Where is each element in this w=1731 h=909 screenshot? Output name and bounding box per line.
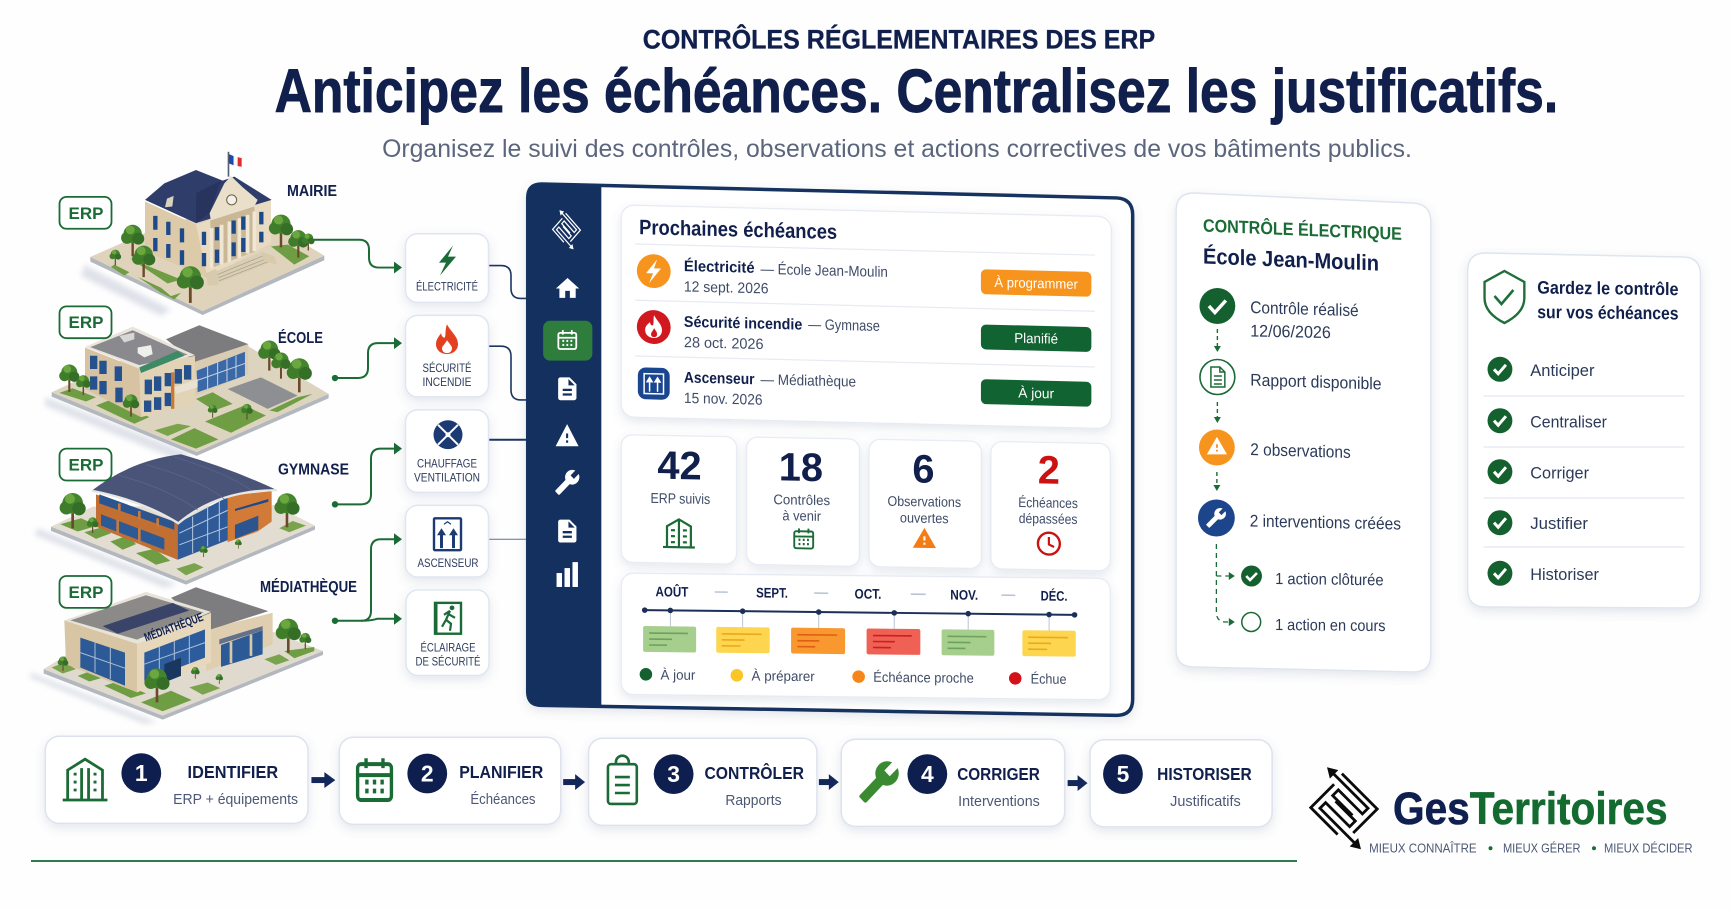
badge: médiathèque: ERP — [69, 583, 103, 602]
step 1: identifier: 1 — [135, 760, 148, 786]
stat: contrôles à venir: à venir — [782, 507, 821, 524]
card: sécurité incendie: INCENDIE — [422, 375, 472, 389]
building: école — [44, 325, 329, 459]
step: observations — [1199, 430, 1351, 466]
tagline — [1369, 841, 1692, 856]
arrow — [563, 774, 585, 790]
step 1: identifier: IDENTIFIER — [188, 762, 278, 782]
equipment cards — [406, 234, 489, 676]
badge: école — [60, 306, 112, 338]
row: sécurité incendie: Sécurité incendie — [684, 314, 803, 334]
sidebar warning icon — [556, 424, 579, 446]
heading: Gardez le contrôle — [1537, 277, 1679, 299]
row: sécurité incendie: — Gymnase — [808, 316, 880, 335]
step: contrôle réalisé: Contrôle réalisé — [1250, 298, 1359, 320]
site name: École Jean-Moulin — [1203, 243, 1379, 276]
step 5: historiser: 5 — [1117, 761, 1130, 787]
stat: contrôles à venir — [747, 437, 860, 566]
step 3: contrôler: 3 — [667, 761, 680, 787]
step 5: historiser — [1090, 740, 1272, 827]
panel: indicateurs — [621, 435, 1110, 571]
row: électricité: — École Jean-Moulin — [761, 261, 888, 281]
step 4: corriger — [841, 739, 1065, 826]
stat: échéances dépassées — [991, 441, 1110, 571]
step 4: corriger: 4 — [921, 761, 934, 787]
step: interventions — [1198, 500, 1401, 536]
stat: observations ouvertes: Observations — [887, 493, 961, 510]
item: historiser — [1488, 561, 1599, 586]
card: ascenseur: ASCENSEUR — [418, 556, 479, 570]
badge: gymnase — [60, 449, 112, 480]
legend: Échéance proche — [873, 669, 974, 686]
item: anticiper: Anticiper — [1530, 361, 1595, 380]
stat: échéances dépassées: dépassées — [1019, 510, 1077, 527]
step: observations: 2 observations — [1250, 440, 1351, 462]
row: ascenseur: Ascenseur — [684, 370, 755, 388]
card: sécurité incendie: SÉCURITÉ — [422, 360, 472, 375]
step 5: historiser: HISTORISER — [1157, 764, 1252, 784]
step 5: historiser: Justificatifs — [1170, 793, 1241, 810]
step: interventions: 2 interventions créées — [1250, 511, 1401, 534]
header — [275, 22, 1558, 163]
surtitle: CONTRÔLES RÉGLEMENTAIRES DES ERP — [643, 22, 1155, 55]
heading: CONTRÔLE ÉLECTRIQUE — [1203, 214, 1402, 244]
row: sécurité incendie: 28 oct. 2026 — [684, 334, 764, 353]
sidebar bars icon — [557, 562, 578, 587]
row: sécurité incendie: Planifié — [1014, 330, 1058, 347]
item: historiser: Historiser — [1530, 565, 1599, 584]
legend — [640, 666, 1067, 687]
row: électricité: 12 sept. 2026 — [684, 278, 768, 297]
stat: échéances dépassées: Échéances — [1018, 494, 1078, 511]
tagline: MIEUX CONNAÎTRE — [1369, 841, 1477, 856]
legend: Échue — [1031, 671, 1067, 687]
sidebar — [528, 184, 601, 706]
logo text — [1369, 783, 1692, 856]
badge: mairie: ERP — [69, 204, 103, 223]
label: gymnase: GYMNASE — [278, 462, 349, 479]
card: électricité: ÉLECTRICITÉ — [416, 278, 478, 293]
card: éclairage de sécurité — [406, 590, 489, 676]
step 3: contrôler: CONTRÔLER — [704, 762, 804, 783]
action clôturée: 1 action clôturée — [1275, 571, 1384, 589]
arrow — [311, 772, 335, 788]
footer rule — [31, 860, 1297, 862]
badge: médiathèque — [60, 576, 112, 608]
item: centraliser — [1488, 408, 1607, 433]
logo wordmark: GesTerritoires — [1393, 783, 1668, 834]
row: ascenseur: 15 nov. 2026 — [684, 390, 763, 409]
shield icon — [1485, 271, 1524, 323]
stat: contrôles à venir: 18 — [779, 445, 823, 490]
months: NOV. — [950, 587, 978, 603]
logo mark — [1299, 763, 1389, 854]
process steps — [45, 736, 1272, 827]
label: mairie: MAIRIE — [287, 183, 337, 200]
step: rapport disponible: Rapport disponible — [1250, 370, 1382, 393]
step 2: planifier: 2 — [421, 761, 434, 787]
sidebar doc icon — [558, 377, 576, 400]
legend: À jour — [661, 666, 696, 683]
months: AOÛT — [656, 582, 689, 600]
timeline boxes — [643, 626, 1076, 657]
card: ascenseur — [406, 505, 488, 577]
card: chauffage ventilation: CHAUFFAGE — [417, 457, 477, 471]
sidebar doc icon 2 — [558, 520, 576, 542]
ERP badges — [60, 197, 112, 608]
stat: ERP suivis: 42 — [657, 444, 702, 488]
timeline axis — [642, 607, 1077, 618]
stat: échéances dépassées: 2 — [1038, 448, 1060, 493]
step: contrôle réalisé — [1199, 288, 1359, 342]
row: ascenseur — [638, 367, 1091, 417]
sidebar active calendar — [543, 321, 592, 361]
step 1: identifier: ERP + équipements — [173, 791, 298, 808]
dashed branches — [1216, 544, 1235, 626]
card: électricité — [406, 234, 488, 302]
months: OCT. — [855, 586, 881, 602]
stat: ERP suivis: ERP suivis — [650, 491, 710, 508]
action clôturée — [1241, 566, 1384, 589]
sidebar wrench icon — [555, 470, 579, 495]
action en cours: 1 action en cours — [1275, 617, 1386, 635]
connectors: equipment to dashboard — [489, 266, 531, 539]
arrow — [819, 774, 839, 790]
building: gymnase — [34, 454, 315, 588]
badge: école: ERP — [69, 313, 103, 332]
left column: sites and equipment — [29, 152, 531, 724]
row: ascenseur: À jour — [1018, 385, 1054, 401]
item: justifier — [1488, 510, 1588, 535]
step 2: planifier: Échéances — [470, 791, 536, 808]
arrow — [1214, 329, 1221, 352]
dashboard — [528, 184, 1133, 715]
legend: À préparer — [752, 667, 815, 684]
arrow — [1214, 402, 1221, 423]
label: école: ÉCOLE — [278, 328, 323, 347]
step 2: planifier — [339, 737, 561, 824]
months: SEPT. — [756, 584, 788, 601]
card: éclairage de sécurité: ÉCLAIRAGE — [420, 640, 476, 655]
step: contrôle réalisé: 12/06/2026 — [1250, 321, 1331, 342]
wall sign: MÉDIATHÈQUE — [142, 609, 205, 644]
item: corriger: Corriger — [1530, 463, 1589, 483]
step: rapport disponible — [1200, 360, 1382, 394]
heading: Prochaines échéances — [639, 216, 837, 244]
item: centraliser: Centraliser — [1530, 412, 1607, 432]
row: électricité: Électricité — [684, 258, 755, 277]
badge: gymnase: ERP — [69, 456, 103, 475]
panel: prochaines échéances — [621, 205, 1111, 429]
item: corriger — [1488, 459, 1589, 484]
step 3: contrôler: Rapports — [725, 792, 782, 809]
step 4: corriger: CORRIGER — [957, 764, 1040, 784]
action en cours — [1242, 612, 1386, 635]
tagline: MIEUX GÉRER — [1503, 841, 1581, 856]
step 4: corriger: Interventions — [958, 793, 1040, 810]
connectors: buildings to equipment — [314, 240, 402, 625]
badge: mairie — [60, 197, 112, 229]
dashboard frame — [528, 184, 1133, 715]
stat: contrôles à venir: Contrôles — [773, 491, 830, 508]
stat: observations ouvertes: 6 — [912, 447, 935, 492]
step 2: planifier: PLANIFIER — [459, 762, 543, 782]
months — [656, 582, 1067, 604]
row: électricité — [637, 254, 1091, 305]
months: DÉC. — [1041, 588, 1067, 604]
panel: contrôle électrique — [1176, 193, 1431, 672]
subtitle: Organisez le suivi des contrôles, observations et actions correctives de vos bâtiments publics. — [382, 135, 1412, 163]
row: ascenseur: — Médiathèque — [761, 371, 856, 391]
card: sécurité incendie — [406, 315, 488, 397]
label: médiathèque: MÉDIATHÈQUE — [260, 577, 357, 596]
step 1: identifier — [45, 736, 308, 823]
row: électricité: À programmer — [994, 274, 1078, 292]
sidebar logo — [548, 208, 585, 251]
stat: observations ouvertes: ouvertes — [900, 509, 949, 526]
card: chauffage ventilation — [406, 410, 488, 492]
card: éclairage de sécurité: DE SÉCURITÉ — [415, 654, 481, 669]
sidebar home icon — [556, 278, 579, 298]
item: justifier: Justifier — [1530, 514, 1588, 533]
panel: gardez le contrôle — [1468, 253, 1700, 608]
item: anticiper — [1488, 357, 1595, 382]
panel: gardez le contrôle: sur vos échéances — [1537, 302, 1679, 323]
stat: ERP suivis — [621, 435, 737, 564]
step 3: contrôler — [589, 738, 817, 825]
row: sécurité incendie — [637, 310, 1091, 361]
stat: observations ouvertes — [869, 439, 981, 569]
building: mairie — [81, 152, 324, 316]
panel: calendrier — [621, 573, 1110, 700]
arrow — [1213, 472, 1220, 491]
building: médiathèque — [29, 587, 323, 724]
card: chauffage ventilation: VENTILATION — [414, 471, 480, 484]
tagline: MIEUX DÉCIDER — [1604, 841, 1692, 856]
building labels — [260, 183, 357, 596]
arrow — [1068, 775, 1088, 791]
